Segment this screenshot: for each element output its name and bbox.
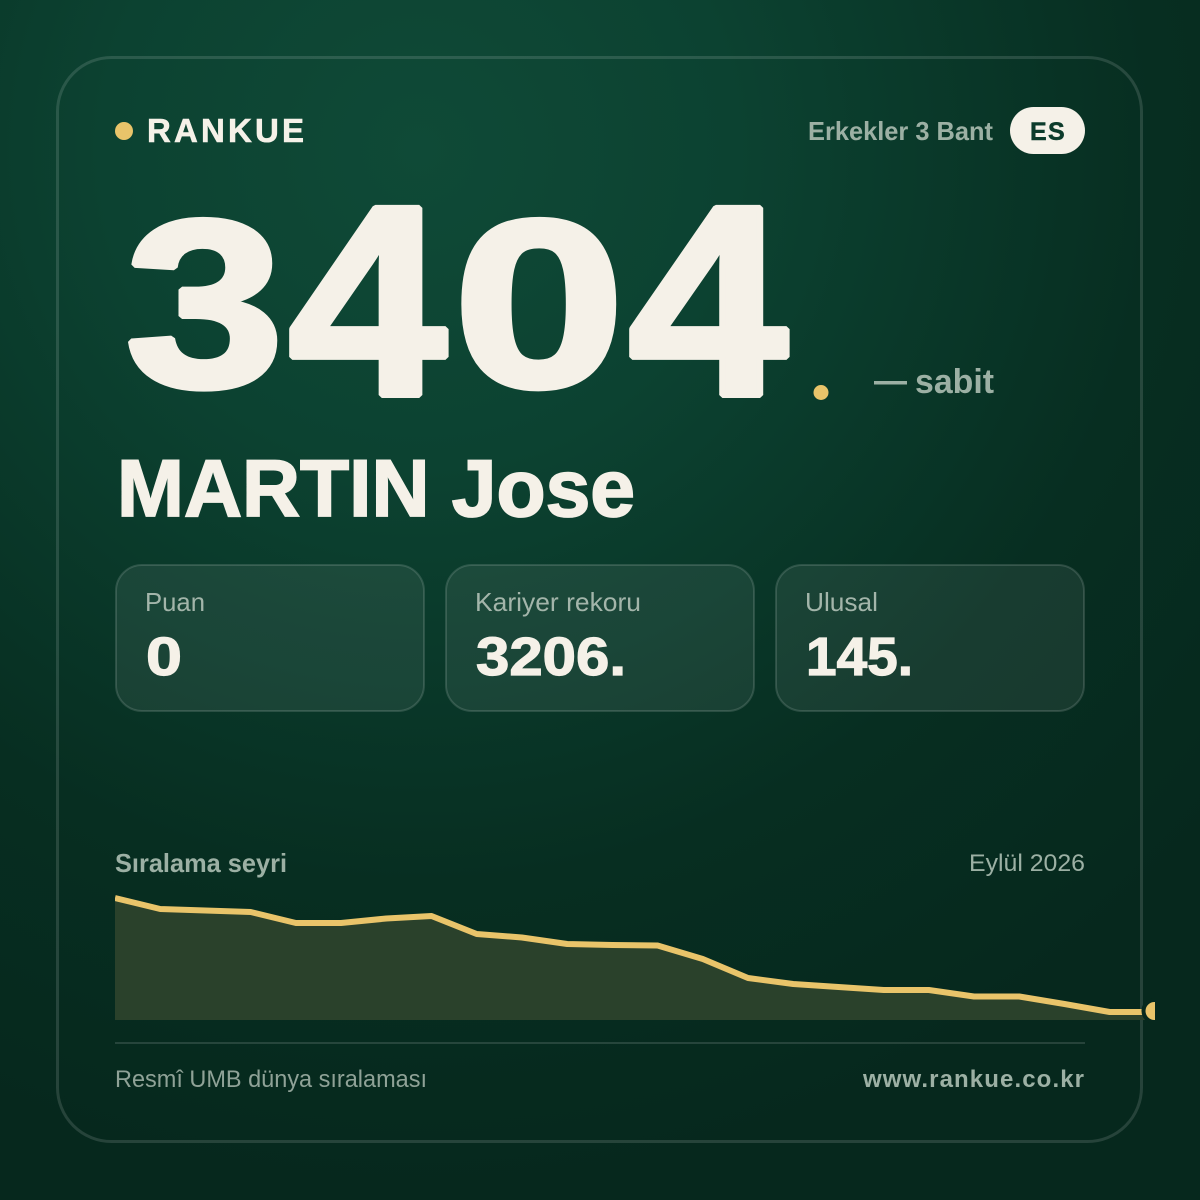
rank number: 4	[288, 149, 449, 453]
category label: Erkekler 3 Bant	[808, 116, 993, 146]
divider	[115, 1042, 1085, 1044]
panel: points: 0	[146, 627, 182, 687]
line chart: ranking trend	[115, 898, 1166, 1022]
panel: points	[116, 565, 424, 711]
panel: career record	[446, 565, 754, 711]
rank number: 0	[453, 172, 625, 437]
chart date: Eylül 2026	[969, 850, 1085, 877]
panel: career record: Kariyer rekoru	[475, 587, 641, 617]
panel: national rank	[776, 565, 1084, 711]
player name: MARTIN Jose	[117, 444, 635, 534]
country badge: ES	[1030, 118, 1065, 146]
panel: national rank: 145.	[806, 627, 913, 687]
footer source: Resmî UMB dünya sıralaması	[115, 1066, 427, 1093]
rank number: 4	[628, 149, 790, 453]
panel: national rank: Ulusal	[805, 587, 878, 617]
category and country	[808, 107, 1085, 154]
icon: brand dot	[115, 122, 133, 140]
brand name: RANKUE	[147, 112, 304, 149]
country badge	[1010, 107, 1085, 154]
rank change	[874, 363, 994, 401]
rank number: 3	[125, 172, 284, 437]
footer website: www.rankue.co.kr	[862, 1066, 1084, 1093]
panel: points: Puan	[145, 587, 205, 617]
rank change: sabit	[915, 363, 994, 401]
rank number	[125, 149, 790, 453]
brand logo	[115, 112, 304, 149]
panel: career record: 3206.	[476, 627, 626, 687]
icon: accent dot	[814, 385, 828, 400]
chart heading: Sıralama seyri	[115, 848, 287, 878]
